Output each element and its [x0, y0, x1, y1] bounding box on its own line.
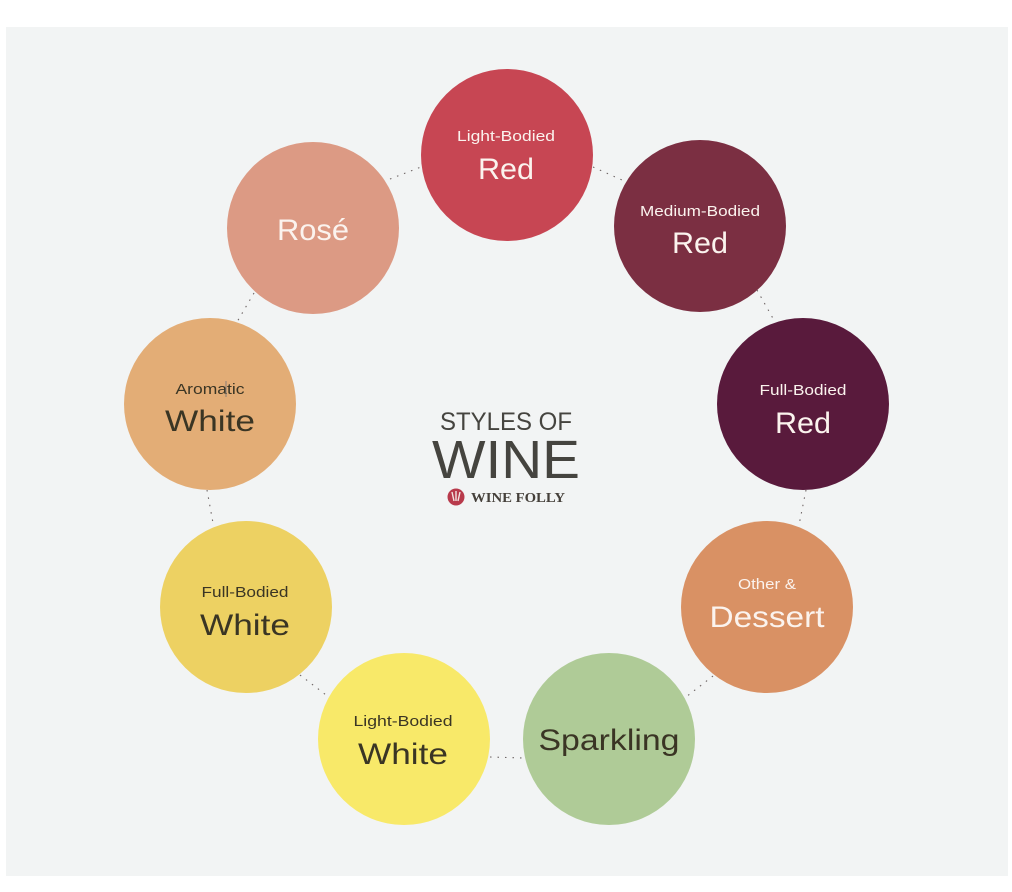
circle: light-bodied red: Light-Bodied — [457, 128, 555, 145]
icon: wine folly mark — [448, 488, 464, 506]
circle: aromatic white — [124, 318, 296, 490]
circle: full-bodied white: Full-Bodied — [202, 584, 288, 601]
circle: full-bodied white: White — [200, 609, 290, 642]
title — [432, 408, 580, 490]
circle: full-bodied red — [717, 318, 889, 490]
circle: other and dessert: Other & — [738, 576, 796, 593]
circle: other and dessert — [681, 521, 853, 693]
circle: aromatic white: White — [165, 405, 255, 438]
logo: wine folly: WINE FOLLY — [471, 491, 565, 506]
circle: sparkling: Sparkling — [538, 724, 680, 757]
circle: rose — [227, 142, 399, 314]
circle: full-bodied red: Full-Bodied — [760, 382, 846, 399]
circle: sparkling — [523, 653, 695, 825]
circle: light-bodied white: White — [358, 738, 448, 771]
circle: light-bodied red — [421, 69, 593, 241]
circle: light-bodied white — [318, 653, 490, 825]
circle: light-bodied white: Light-Bodied — [354, 713, 452, 730]
circle: medium-bodied red: Medium-Bodied — [640, 203, 760, 220]
circle: other and dessert: Dessert — [710, 601, 825, 634]
dotted connectors — [207, 167, 806, 758]
circle: medium-bodied red: Red — [672, 227, 728, 260]
circle: rose: Rosé — [277, 214, 349, 247]
circle: aromatic white: Aromatic — [176, 381, 245, 398]
title: WINE — [432, 430, 580, 490]
circle: full-bodied red: Red — [775, 407, 831, 440]
circle: full-bodied white — [160, 521, 332, 693]
circle: light-bodied red: Red — [478, 153, 534, 186]
circle: medium-bodied red — [614, 140, 786, 312]
title: STYLES OF — [440, 408, 572, 436]
logo: wine folly — [448, 488, 565, 506]
